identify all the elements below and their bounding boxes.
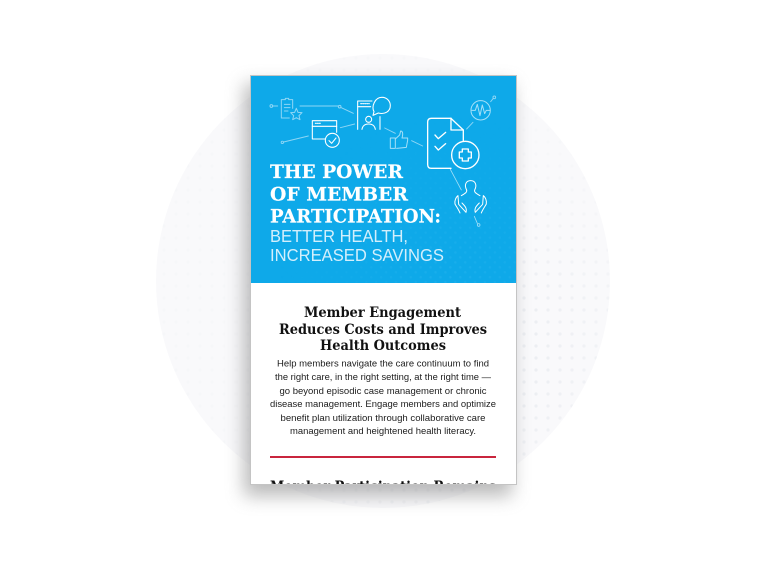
heading: member engagement [280,306,486,350]
red divider [270,456,496,458]
icon: person in caring hands [450,169,486,226]
body text: benefit plan utilization through collaborative care [280,413,486,424]
body text [270,358,496,437]
title: PARTICIPATION: [270,206,441,228]
heading: member engagement: Reduces Costs and Improves [279,322,487,338]
body text: Help members navigate the care continuum to find [277,358,489,370]
icon: checklist document with plus [428,118,479,169]
panel: blue header [251,76,516,283]
icon network [270,96,496,226]
subtitle [271,230,444,261]
subtitle: INCREASED SAVINGS [270,245,444,265]
body text: the right care, in the right setting, at the right time — [275,372,491,383]
background circle [156,54,610,508]
icon: heartbeat circle [471,101,490,120]
subtitle: BETTER HEALTH, [270,226,408,246]
body text: management and heightened health literacy. [290,426,476,437]
clipped heading: member participation: Member Participation Remains [270,479,496,495]
card border [250,76,516,484]
heading: member engagement: Health Outcomes [320,338,446,354]
connector lines [281,96,496,146]
icon: browser with check [312,121,339,147]
title [270,164,440,223]
body text: disease management. Engage members and optimize [270,399,496,410]
icon: thumbs up [390,131,408,148]
title: OF MEMBER [270,184,408,206]
body text: go beyond episodic case management or chronic [280,386,487,397]
heading: member engagement: Member Engagement [304,305,461,321]
icon: profile card with speech bubble [358,97,390,129]
infographic card [251,76,516,495]
card shadow [244,84,512,496]
icon: clipboard with star [270,98,353,120]
title: THE POWER [270,161,403,183]
